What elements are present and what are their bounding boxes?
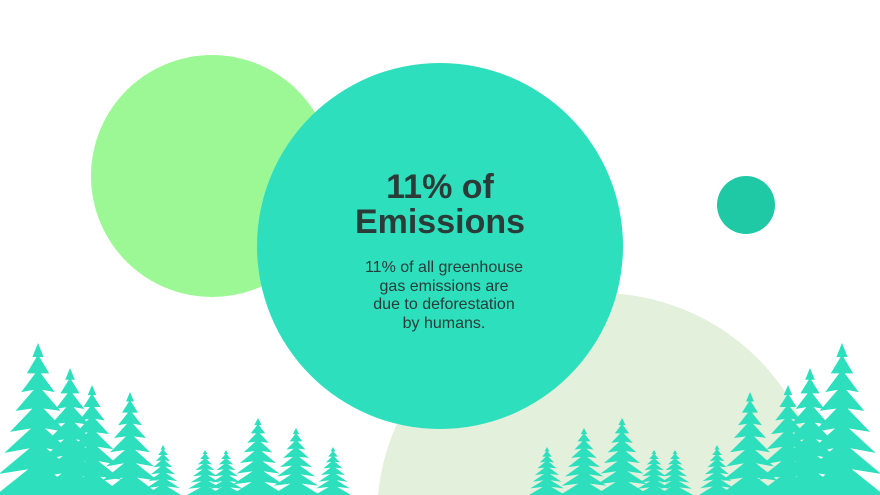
trees: left forest <box>0 343 351 495</box>
trees: right forest <box>529 343 880 495</box>
body text: gas emissions are <box>380 278 508 294</box>
title: Emissions <box>355 203 525 241</box>
body text: due to deforestation <box>373 296 515 313</box>
circle: main teal <box>257 63 623 429</box>
circle: pale green background <box>378 293 822 495</box>
title: 11% of <box>386 168 494 206</box>
circle: small teal dot <box>717 176 775 234</box>
body text: 11% of all greenhouse <box>365 259 523 276</box>
body text: by humans. <box>403 314 485 332</box>
title <box>355 168 525 241</box>
circle: light green <box>91 55 333 297</box>
body text <box>365 259 523 332</box>
